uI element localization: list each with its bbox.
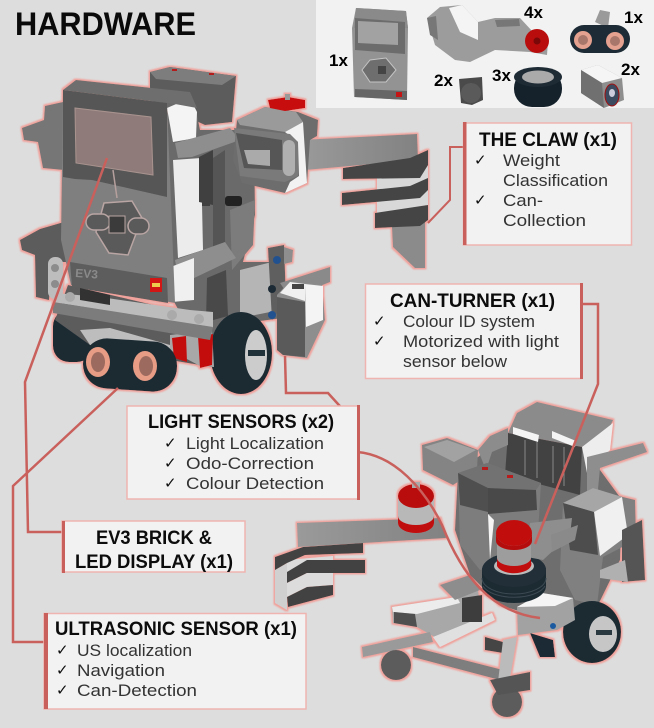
claw list: Can- bbox=[503, 191, 543, 210]
back wheel left bbox=[53, 310, 93, 362]
can-turner list bbox=[373, 312, 559, 371]
ultrasonic sensor bbox=[80, 328, 179, 393]
rear battery box bbox=[150, 67, 236, 125]
ultrasonic list bbox=[56, 641, 197, 700]
quantity labels: 1x bbox=[329, 51, 348, 70]
light sensors list: Odo-Correction bbox=[186, 454, 314, 473]
right motor bbox=[560, 488, 645, 605]
rear frame arms bbox=[478, 428, 508, 470]
light sensors list: Light Localization bbox=[186, 434, 324, 453]
quantity labels: 1x bbox=[624, 8, 643, 27]
motor top left bbox=[422, 438, 478, 485]
second robot render bbox=[275, 402, 647, 717]
EV3 logo: EV3 bbox=[75, 266, 99, 282]
claw arm beam bbox=[300, 134, 418, 170]
claw fingers bbox=[342, 150, 428, 268]
control buttons bbox=[86, 201, 149, 255]
rear side arm upper bbox=[22, 102, 64, 170]
leader: light sensor rear bbox=[357, 452, 540, 618]
claw list: Weight bbox=[503, 151, 560, 170]
light sensors list: ✓ bbox=[164, 434, 177, 452]
base silhouette bbox=[455, 433, 622, 618]
leader: EV3 brick bbox=[25, 158, 107, 532]
title: HARDWARE bbox=[15, 6, 196, 42]
side structure bbox=[167, 97, 293, 340]
claw heading: THE CLAW (x1) bbox=[479, 130, 617, 151]
icon: large motor bbox=[427, 5, 549, 62]
right wheel bbox=[563, 601, 621, 663]
panel: the claw bbox=[463, 122, 632, 245]
light sensors list: Colour Detection bbox=[186, 474, 324, 493]
can-turner list: sensor below bbox=[403, 352, 508, 371]
centre red motor and arm bbox=[496, 518, 578, 573]
light sensors list bbox=[164, 434, 324, 493]
rear side arm lower bbox=[20, 222, 66, 300]
ultrasonic list: Can-Detection bbox=[77, 681, 197, 700]
leader: can-turner bbox=[535, 304, 598, 544]
ultrasonic list: ✓ bbox=[56, 681, 69, 699]
icon: EV3 brick bbox=[352, 8, 408, 100]
claw list: ✓ bbox=[474, 191, 487, 209]
light sensor front bbox=[277, 281, 325, 358]
LEGO logo bbox=[150, 278, 162, 292]
ev3 brick bbox=[61, 80, 197, 303]
can-turner list: Motorized with light bbox=[403, 332, 559, 351]
can-turner heading: CAN-TURNER (x1) bbox=[390, 291, 555, 312]
base under frame bbox=[55, 285, 218, 368]
can-turner list: ✓ bbox=[373, 312, 386, 330]
ultrasonic list: US localization bbox=[77, 641, 192, 660]
light sensors list: ✓ bbox=[164, 474, 177, 492]
claw list: Classification bbox=[503, 171, 608, 190]
panel: parts inventory bbox=[316, 0, 654, 108]
panel: EV3 brick and LED display: LED DISPLAY (x1) bbox=[75, 552, 233, 573]
dark bracket under sensor bbox=[530, 633, 555, 657]
quantity labels: 4x bbox=[524, 3, 543, 22]
leader: ultrasonic sensor bbox=[13, 388, 118, 642]
lower beam bbox=[53, 288, 213, 340]
quantity labels: 2x bbox=[621, 60, 640, 79]
quantity labels: 3x bbox=[492, 66, 511, 85]
light sensor on rear bbox=[517, 593, 575, 635]
panel: can-turner bbox=[366, 283, 583, 379]
red drive motor bbox=[170, 330, 214, 367]
upper motor bbox=[233, 94, 318, 193]
rear box bbox=[505, 402, 613, 495]
panel: EV3 brick and LED display bbox=[62, 521, 245, 573]
quantity labels: 2x bbox=[434, 71, 453, 90]
light sensors list: ✓ bbox=[164, 454, 177, 472]
main robot render bbox=[20, 67, 428, 394]
front wheel right bbox=[210, 312, 272, 394]
leader: claw bbox=[428, 147, 463, 223]
can-turner list: Colour ID system bbox=[403, 312, 535, 331]
LCD screen bbox=[75, 108, 153, 175]
panel: light sensors bbox=[127, 405, 360, 500]
icon: colour sensor bbox=[581, 65, 624, 108]
can-turner list: ✓ bbox=[373, 332, 386, 350]
claw list: Collection bbox=[503, 211, 586, 230]
left pillar details bbox=[48, 257, 63, 299]
red motor left bbox=[398, 482, 434, 533]
centre brick bbox=[458, 463, 541, 570]
centre tire bbox=[482, 553, 546, 603]
claw list: ✓ bbox=[474, 151, 487, 169]
ultrasonic list: ✓ bbox=[56, 641, 69, 659]
icon: tire bbox=[514, 67, 562, 107]
ultrasonic list: Navigation bbox=[77, 661, 165, 680]
ultrasonic list: ✓ bbox=[56, 661, 69, 679]
claw beam and fingers bbox=[275, 518, 446, 610]
turning beam behind colour sensor bbox=[280, 267, 330, 298]
quantity labels bbox=[329, 3, 643, 90]
lower frame bbox=[362, 575, 530, 717]
icon: ball caster bbox=[459, 77, 483, 105]
leader: light sensor front bbox=[285, 356, 358, 426]
light sensors heading: LIGHT SENSORS (x2) bbox=[148, 412, 334, 433]
EV3 heading: EV3 BRICK & bbox=[96, 528, 212, 549]
claw list bbox=[474, 151, 608, 230]
panel: ultrasonic sensor bbox=[44, 613, 306, 709]
ultrasonic heading: ULTRASONIC SENSOR (x1) bbox=[55, 619, 297, 640]
icon: ultrasonic sensor bbox=[570, 10, 630, 53]
